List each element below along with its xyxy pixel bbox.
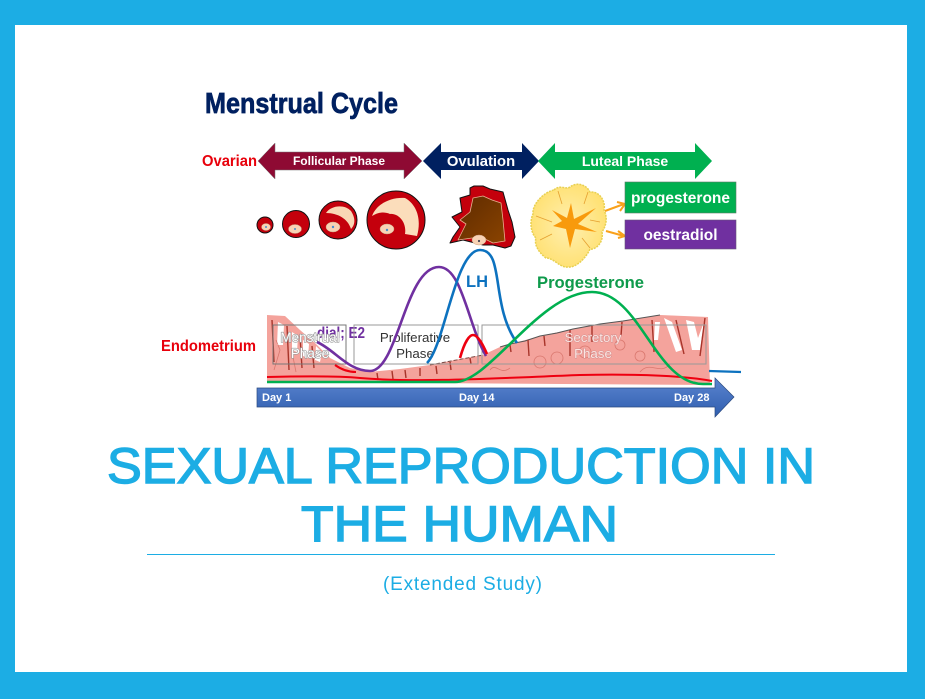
- arrow: ovulation: [423, 143, 539, 179]
- arrow: ovulation: Ovulation: [447, 154, 515, 170]
- icon: growing follicles: [257, 191, 425, 249]
- timeline arrow: Day 1: [262, 392, 291, 404]
- icon: ruptured follicle: [450, 186, 515, 248]
- timeline arrow: [257, 378, 734, 417]
- curve: red hormone peak: [460, 335, 487, 358]
- main title: THE HUMAN: [301, 496, 618, 552]
- label: partly hidden oestradiol curve label: dial; E2: [317, 325, 365, 342]
- curve: oestradiol: [317, 267, 486, 371]
- main title: SEXUAL REPRODUCTION IN: [107, 438, 815, 494]
- box: progesterone: [625, 182, 736, 213]
- phase box: menstrual: Phase: [291, 346, 329, 361]
- phase box: proliferative: Proliferative: [380, 330, 450, 345]
- phase box: menstrual: Menstrual: [280, 330, 340, 345]
- subtitle: (Extended Study): [383, 574, 542, 595]
- arrow: follicular phase: Follicular Phase: [293, 154, 385, 168]
- curve: LH tail: [709, 371, 741, 372]
- curve: progesterone: [267, 292, 712, 384]
- main title: [107, 438, 815, 552]
- curve: red hormone baseline: [267, 365, 712, 381]
- arrow: follicular phase: [258, 143, 422, 179]
- box: oestradiol: [625, 220, 736, 249]
- icon: corpus luteum: [531, 184, 606, 267]
- diagram title: Menstrual Cycle: [205, 88, 398, 120]
- phase box: proliferative: [354, 325, 478, 364]
- phase box: secretory: [482, 325, 706, 364]
- arrow: to oestradiol: [606, 231, 625, 238]
- box: oestradiol: oestradiol: [643, 227, 718, 244]
- phase box: secretory: Secretory: [565, 330, 622, 345]
- arrow: luteal phase: Luteal Phase: [582, 153, 668, 169]
- phase box: proliferative: Phase: [396, 346, 434, 361]
- phase box: menstrual: [273, 325, 346, 364]
- phase box: secretory: Phase: [574, 346, 612, 361]
- label: progesterone curve: Progesterone: [537, 274, 644, 292]
- curve: LH: [427, 250, 517, 363]
- timeline arrow: Day 28: [674, 392, 709, 404]
- timeline arrow: Day 14: [459, 392, 495, 404]
- arrow: to progesterone: [605, 202, 625, 211]
- box: progesterone: progesterone: [631, 190, 730, 207]
- arrow: luteal phase: [538, 143, 712, 179]
- label: ovarian: Ovarian: [202, 153, 257, 170]
- endometrium illustration: [267, 315, 710, 385]
- label: endometrium: Endometrium: [161, 338, 256, 355]
- label: LH: LH: [466, 272, 488, 291]
